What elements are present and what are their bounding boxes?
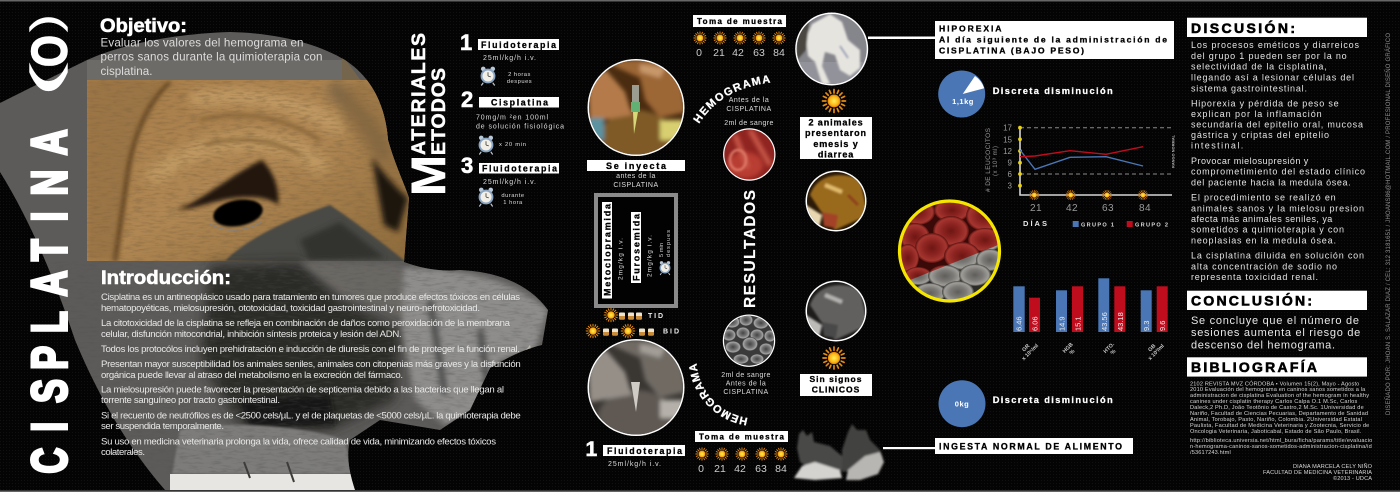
photo: dog with hyporexia xyxy=(795,12,869,86)
line chart: leucocitos: 15 xyxy=(1003,135,1013,144)
step 3: fluidoterapia: 1 hora xyxy=(503,200,523,206)
label: se inyecta: CISPLATINA xyxy=(613,182,659,189)
bar chart: hemogram values: % xyxy=(1069,349,1076,356)
photo: red blood cells xyxy=(723,128,776,181)
heading: materiales y metodos: ETODOS xyxy=(428,68,450,155)
sampling timeline: bottom: 84 xyxy=(775,463,787,475)
panel: bibliografia: Animal, Torobajo, Pasto, Nariño, Colombia. 2Universidad Estatal xyxy=(1190,417,1362,423)
step 2: cisplatina: x 20 min xyxy=(499,142,526,148)
curved heading: hemograma bottom: HEMOGRAMA xyxy=(689,363,748,426)
introduccion block: Todos los protocólos incluyen prehidratación e inducción de diuresis con el fin de proteger la función renal. xyxy=(101,344,520,355)
photo: grayscale food xyxy=(804,280,868,342)
panel: conclusion: CONCLUSIÓN: xyxy=(1191,292,1312,308)
panel: discusion: Hiporexia y pérdida de peso se xyxy=(1191,98,1339,108)
callout: hiporexia xyxy=(935,21,1174,59)
step 3: fluidoterapia: Fluidoterapia xyxy=(482,164,557,174)
line chart: leucocitos: 12 xyxy=(1003,147,1013,156)
bar chart: hemogram values: GB xyxy=(1147,343,1157,353)
credits: ©2013 - UDCA xyxy=(1333,475,1372,482)
bar chart: hemogram values: 14.9 xyxy=(1058,316,1066,331)
panel: discusion: explican por la inflamación xyxy=(1191,109,1322,119)
vertical designer credit: DISEÑADO POR: JHOAN S. SALAZAR DIAZ / CEL: 312 3181651 / JHOANS86@HOTMAIL.COM / PROFESIONAL DISEÑO GRÁFICO xyxy=(1385,33,1392,415)
objetivo block: Objetivo: xyxy=(100,15,187,37)
bar chart: hemogram values xyxy=(1013,278,1168,362)
label: fluidoterapia after treatment: 1 xyxy=(586,438,598,461)
panel: discusion: El procedimiento se realizó en xyxy=(1191,192,1336,202)
panel: bibliografia: Nariño, Facultad de Ciencias Pecuarias, Departamento de Sanidad xyxy=(1190,411,1368,417)
introduccion block: Si el recuento de neutrófilos es de <2500 cels/µL. y el de plaquetas de <5000 cels/µL. la quimioterapia debe xyxy=(101,410,521,422)
panel: bibliografia: BIBLIOGRAFÍA xyxy=(1191,359,1317,375)
label: se inyecta: antes de la xyxy=(616,173,656,180)
heading: materiales y metodos: M xyxy=(403,155,456,196)
bar chart: hemogram values: HGB xyxy=(1062,342,1075,355)
step 2: cisplatina: 2 xyxy=(461,87,473,112)
panel: bibliografia: /53617243.html xyxy=(1190,450,1231,456)
label: emesis y diarrea: emesis y xyxy=(813,139,859,149)
bar chart: hemogram values: x 10⁶/ml xyxy=(1021,343,1040,362)
line chart: leucocitos: 9 xyxy=(1008,159,1013,168)
panel: bibliografia: http://biblioteca.universia.net/html_bura/ficha/params/title/evaluacio xyxy=(1190,438,1372,444)
line chart: leucocitos xyxy=(985,124,1176,228)
line chart: leucocitos: # DE LEUCOCITOS xyxy=(985,127,992,192)
label: emesis y diarrea: presentaron xyxy=(805,128,867,138)
objetivo block xyxy=(100,15,322,78)
text: before cisplatin sample bottom: CISPLATINA xyxy=(723,389,769,396)
title: CISPLATINA (O): ) xyxy=(23,14,68,32)
pie chart: weight 0kg: 0kg xyxy=(955,400,969,408)
text: before cisplatin sample bottom: 2ml de sangre xyxy=(721,372,771,379)
label: fluidoterapia after treatment xyxy=(586,438,685,468)
introduccion block: La mielosupresión puede favorecer la presentación de septicemia debido a las bacterias que llegan al xyxy=(101,384,504,396)
panel: conclusion: Se concluye que el número de xyxy=(1191,315,1359,327)
label: fluidoterapia after treatment: Fluidoterapia xyxy=(607,446,682,456)
step 1: fluidoterapia: 1 xyxy=(460,30,472,55)
bar chart: hemogram values: 6.06 xyxy=(1030,316,1040,331)
panel: discusion: comprometimiento del estado clínico xyxy=(1191,167,1365,177)
line chart: leucocitos: RANGO NORMAL xyxy=(1172,134,1176,168)
background photo: boxer dog head xyxy=(0,0,560,492)
label: emesis y diarrea: 2 animales xyxy=(808,118,864,128)
panel: discusion: intestinal. xyxy=(1191,141,1243,151)
objetivo block: perros sanos durante la quimioterapia con xyxy=(100,50,322,64)
label: fluidoterapia after treatment: 25ml/kg/h i.v. xyxy=(608,461,661,468)
bar chart: hemogram values: 6.46 xyxy=(1014,316,1024,331)
photo: color food xyxy=(804,170,868,232)
panel: metoclopramida and furosemida: Metoclopramida xyxy=(602,203,612,296)
connector line to hiporexia xyxy=(868,36,936,39)
sampling timeline: bottom: 42 xyxy=(734,463,746,475)
photo: gray blood cells xyxy=(722,314,777,369)
introduccion block: ser suspendida temporalmente. xyxy=(101,421,224,432)
line chart: leucocitos: 21 xyxy=(1030,203,1042,214)
panel: bibliografia: administracion de cisplatina Evaluation of the hemogram in healthy xyxy=(1190,393,1369,399)
panel: discusion: alta concentración de sodio no xyxy=(1191,261,1337,271)
step 1: fluidoterapia: despues xyxy=(507,79,532,85)
bar chart: hemogram values: HTO. xyxy=(1103,341,1116,355)
introduccion block xyxy=(101,268,521,458)
label: sin signos clinicos xyxy=(800,374,872,396)
introduccion block: La citotoxicidad de la cisplatina se refleja en combinación de daños como peroxidación de la membrana xyxy=(101,318,511,329)
sun icon: emesis time xyxy=(822,90,846,112)
sampling timeline: top: Toma de muestra xyxy=(697,17,783,26)
objetivo block: Evaluar los valores del hemograma en xyxy=(100,36,304,50)
panel: bibliografia: 2102 REVISTA MVZ CÓRDOBA • Volumen 15(2), Mayo - Agosto xyxy=(1190,380,1359,387)
title: CISPLATINA (O): ( xyxy=(22,63,68,97)
callout: hiporexia: Al día siguiente de la administración de xyxy=(939,34,1167,44)
credits xyxy=(1263,463,1373,482)
label: se inyecta: Se inyecta xyxy=(606,161,667,171)
line chart: leucocitos: DÍAS xyxy=(1023,219,1047,228)
panel: discusion: animales sanos y la mielosu presion xyxy=(1191,203,1364,213)
pie chart: weight 0kg xyxy=(938,380,986,427)
line chart: leucocitos: 6 xyxy=(1008,170,1013,179)
bar chart: hemogram values: 43.18 xyxy=(1116,312,1125,331)
introduccion block: colaterales. xyxy=(101,447,145,458)
text: before cisplatin sample bottom xyxy=(721,372,771,396)
introduccion block: Su uso en medicina veterinaria prolonga la vida, ofrece calidad de vida, minimizando efectos tóxicos xyxy=(101,436,496,448)
introduccion block: torrente sanguíneo por tracto gastrointestinal. xyxy=(101,395,280,406)
credits: DIANA MARCELA CELY NIÑO xyxy=(1293,463,1373,470)
introduccion block: Presentan mayor susceptibilidad los animales seniles, animales con citopenias más graves y la disfunción xyxy=(101,359,521,370)
panel: discusion: afecta más animales seniles, ya xyxy=(1191,214,1332,224)
step 1: fluidoterapia xyxy=(460,30,559,86)
step 3: fluidoterapia: durante xyxy=(501,193,525,199)
credits: FACULTAD DE MEDICINA VETERINARIA xyxy=(1263,470,1372,476)
panel: discusion: DISCUSIÓN: xyxy=(1191,19,1295,36)
photo: color injection xyxy=(588,59,684,156)
text: discreta disminucion top: Discreta disminución xyxy=(993,86,1113,96)
curved heading: hemograma top: HEMOGRAMA xyxy=(692,75,770,124)
callout: hiporexia: HIPOREXIA xyxy=(939,24,1002,34)
pie chart: weight 1,1kg: 1,1kg xyxy=(952,97,974,106)
panel: discusion: Los procesos eméticos y diarreicos xyxy=(1191,40,1360,50)
text: before cisplatin sample top: CISPLATINA xyxy=(726,106,772,113)
step 1: fluidoterapia: Fluidoterapia xyxy=(481,40,556,50)
introduccion block: Cisplatina es un antineoplásico usado para tratamiento en tumores que produce efectos tóxicos en células xyxy=(101,292,520,303)
sampling timeline: bottom: Toma de muestra xyxy=(699,432,785,442)
heading: materiales y metodos xyxy=(403,33,456,196)
label: se inyecta xyxy=(587,160,685,189)
callout: hiporexia: CISPLATINA (BAJO PESO) xyxy=(939,46,1084,56)
line chart: leucocitos: (x 10³ ml) xyxy=(993,146,999,176)
panel: metoclopramida and furosemida: 2mg/kg i.v. xyxy=(646,235,654,277)
dosing frequency: TID xyxy=(604,308,663,322)
sampling timeline: top xyxy=(693,15,786,59)
bar chart: hemogram values: % xyxy=(1110,349,1117,356)
dosing frequency: BID xyxy=(586,324,679,338)
sun icon: no signs time xyxy=(823,347,845,369)
panel: bibliografia: canines under cisplatin therapy Carlos Calpa O.1 M.Sc, Carlos xyxy=(1190,399,1358,405)
panel: discusion: del grupo 1 pueden ser por la no xyxy=(1191,51,1347,61)
bar chart: hemogram values: x 10³/ml xyxy=(1147,343,1166,362)
label: emesis y diarrea xyxy=(800,117,872,160)
objetivo block: cisplatina. xyxy=(100,65,152,78)
panel: metoclopramida and furosemida xyxy=(596,195,676,306)
panel: bibliografia: n-hemograma-caninos-sanos-sometidos-administracion-cisplatina/id xyxy=(1190,444,1372,450)
introduccion block: hematopoyéticas, mielosupresión, ototoxicidad, toxicidad gastrointestinal y neuro-nefrotoxicidad. xyxy=(101,303,480,314)
introduccion block: orgánica puede llevar al atraso del metabolismo en la excreción del fármaco. xyxy=(101,370,403,381)
sampling timeline: top: 21 xyxy=(713,47,725,59)
panel: bibliografia: Oncologia Veterinaria, Jaboticabal, Estado de São Paulo, Brasil. xyxy=(1190,429,1362,435)
sampling timeline: bottom xyxy=(695,431,788,475)
panel: metoclopramida and furosemida: 5 min xyxy=(659,243,665,257)
bar chart: hemogram values: GR xyxy=(1021,343,1031,353)
sampling timeline: bottom: 21 xyxy=(714,463,726,475)
callout: ingesta normal de alimento: INGESTA NORMAL DE ALIMENTO xyxy=(939,442,1122,452)
panel: conclusion: sesiones aumenta el riesgo de xyxy=(1191,327,1360,339)
line chart: leucocitos: 63 xyxy=(1102,203,1114,214)
bar chart: hemogram values: 9.3 xyxy=(1142,321,1151,331)
sampling timeline: top: 84 xyxy=(773,47,785,59)
photo: two boxer dogs xyxy=(794,424,884,480)
panel: metoclopramida and furosemida: despues xyxy=(666,230,672,257)
sampling timeline: top: 0 xyxy=(696,47,702,59)
text: before cisplatin sample top: Antes de la xyxy=(729,97,769,104)
bar chart: hemogram values: 43.56 xyxy=(1100,312,1109,331)
panel: conclusion: descenso del hemograma. xyxy=(1191,339,1335,351)
text: before cisplatin sample bottom: Antes de la xyxy=(726,380,766,388)
step 2: cisplatina: 70mg/m ²en 100ml xyxy=(476,114,548,122)
line chart: leucocitos: 3 xyxy=(1008,182,1013,191)
line chart: leucocitos: 42 xyxy=(1066,203,1078,214)
panel: discusion xyxy=(1187,18,1367,282)
panel: metoclopramida and furosemida: Furosemida xyxy=(632,213,642,281)
label: sin signos clinicos: CLINICOS xyxy=(812,384,860,394)
panel: discusion: secundaria del epitelio oral, mucosa xyxy=(1191,119,1363,129)
panel: discusion: del paciente hacia la medula ósea. xyxy=(1191,178,1351,188)
line chart: leucocitos: GRUPO 1 xyxy=(1081,222,1114,228)
line chart: leucocitos: 17 xyxy=(1003,124,1013,133)
panel: conclusion xyxy=(1187,291,1367,351)
introduccion block: Introducción: xyxy=(101,268,231,289)
step 1: fluidoterapia: 2 horas xyxy=(508,72,531,78)
title: CISPLATINA (O): O xyxy=(22,35,77,67)
panel: discusion: sistema gastrointestinal. xyxy=(1191,83,1307,93)
title: CISPLATINA (O): CISPLATINA xyxy=(23,129,78,474)
step 1: fluidoterapia: 25ml/kg/h i.v. xyxy=(483,55,536,62)
label: emesis y diarrea: diarrea xyxy=(818,150,854,160)
panel: bibliografia: 2010 Evaluación del hemograma en caninos sanos sometidos a la xyxy=(1190,387,1366,393)
panel: discusion: representa toxicidad renal. xyxy=(1191,272,1318,282)
panel: discusion: llegando así a lesionar células del xyxy=(1191,72,1354,82)
photo: grayscale injection xyxy=(588,339,684,436)
sampling timeline: bottom: 0 xyxy=(698,463,704,475)
big blood cells circle xyxy=(898,199,1002,303)
sampling timeline: bottom: 63 xyxy=(755,463,767,475)
pie chart: weight 1,1kg xyxy=(938,70,985,118)
step 3: fluidoterapia: 3 xyxy=(461,153,473,178)
callout: ingesta normal de alimento xyxy=(935,438,1133,454)
panel: bibliografia: Paulista, Facultad de Medicina Veterinaria y Zootecnia, Servicio de xyxy=(1190,423,1369,429)
introduccion block: celular, disfunción mitocondrial, inhibición síntesis proteica y lesión del ADN. xyxy=(101,329,402,340)
text: before cisplatin sample top xyxy=(724,97,774,127)
step 2: cisplatina: de solución fisiológica xyxy=(476,124,564,130)
step 2: cisplatina xyxy=(461,87,564,154)
vertical heading: resultados: RESULTADOS xyxy=(742,190,759,308)
panel: discusion: neoplasias en la medula ósea. xyxy=(1191,236,1336,246)
label: sin signos clinicos: Sin signos xyxy=(810,374,862,384)
dosing frequency: BID: BID xyxy=(663,328,679,336)
panel: discusion: gástrica y criptas del epitelio xyxy=(1191,130,1329,140)
bar chart: hemogram values: 15.1 xyxy=(1074,316,1082,331)
sampling timeline: top: 42 xyxy=(732,47,744,59)
connector line to ingesta normal xyxy=(883,447,936,449)
panel: metoclopramida and furosemida: 2mg/kg i.v. xyxy=(618,238,624,280)
heading: materiales y metodos: ATERIALES xyxy=(408,33,430,155)
step 2: cisplatina: Cisplatina xyxy=(491,98,548,108)
panel: discusion: selectividad de la cisplatina, xyxy=(1191,61,1327,71)
dosing frequency: TID: TID xyxy=(648,313,663,320)
step 3: fluidoterapia xyxy=(461,153,559,206)
step 3: fluidoterapia: 25ml/kg/h i.v. xyxy=(483,179,536,186)
panel: discusion: sometidos a quimioterapia y con xyxy=(1191,225,1344,235)
bar chart: hemogram values: 9.6 xyxy=(1158,321,1167,331)
sampling timeline: top: 63 xyxy=(753,47,765,59)
line chart: leucocitos: 84 xyxy=(1139,203,1151,214)
text: before cisplatin sample top: 2ml de sangre xyxy=(724,120,774,127)
line chart: leucocitos: GRUPO 2 xyxy=(1135,222,1168,228)
panel: bibliografia xyxy=(1187,357,1372,456)
panel: discusion: Provocar mielosupresión y xyxy=(1191,156,1309,166)
panel: discusion: La cisplatina diluida en solución con xyxy=(1191,251,1364,261)
text: discreta disminucion bottom: Discreta disminución xyxy=(993,395,1113,405)
panel: bibliografia: Daleck,2 Ph.D, João Teotônio de Castro,2 M.Sc. 1Universidad de xyxy=(1190,405,1364,411)
